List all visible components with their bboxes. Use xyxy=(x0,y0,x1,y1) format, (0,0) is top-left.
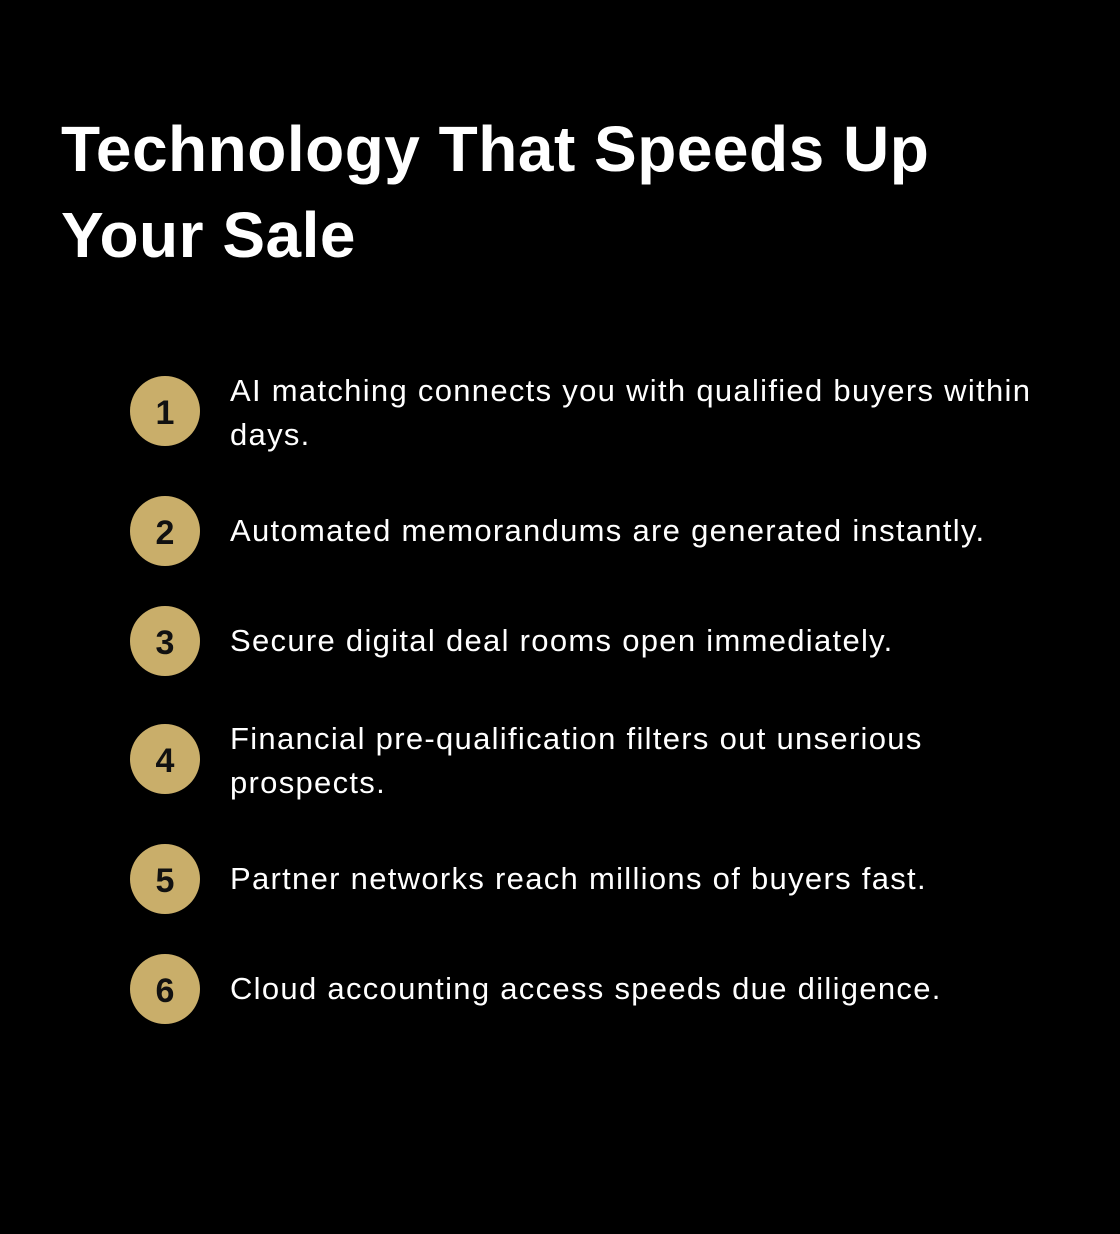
item 3: 3 xyxy=(156,624,174,662)
item 2: Automated memorandums are generated instantly. xyxy=(230,513,985,548)
title: Technology That Speeds Up xyxy=(61,113,929,185)
item 1: days. xyxy=(230,417,311,452)
item 1: AI matching connects you with qualified buyers within xyxy=(230,373,1031,408)
item 3: Secure digital deal rooms open immediately. xyxy=(230,623,894,658)
item 6 xyxy=(130,954,942,1024)
item 2: 2 xyxy=(156,514,174,552)
item 1: 1 xyxy=(156,394,174,432)
title: Your Sale xyxy=(61,199,356,271)
item 6: Cloud accounting access speeds due diligence. xyxy=(230,971,942,1006)
item 2 xyxy=(130,496,985,566)
item 3 xyxy=(130,606,894,676)
item 5: Partner networks reach millions of buyers fast. xyxy=(230,861,927,896)
item 4: Financial pre-qualification filters out unserious xyxy=(230,721,923,756)
item 4 xyxy=(130,721,923,800)
title xyxy=(61,113,929,271)
item 5 xyxy=(130,844,927,914)
item 1 xyxy=(130,373,1031,452)
item 5: 5 xyxy=(156,862,174,900)
item 4: 4 xyxy=(156,742,174,780)
item 4: prospects. xyxy=(230,765,386,800)
item 6: 6 xyxy=(156,972,174,1010)
